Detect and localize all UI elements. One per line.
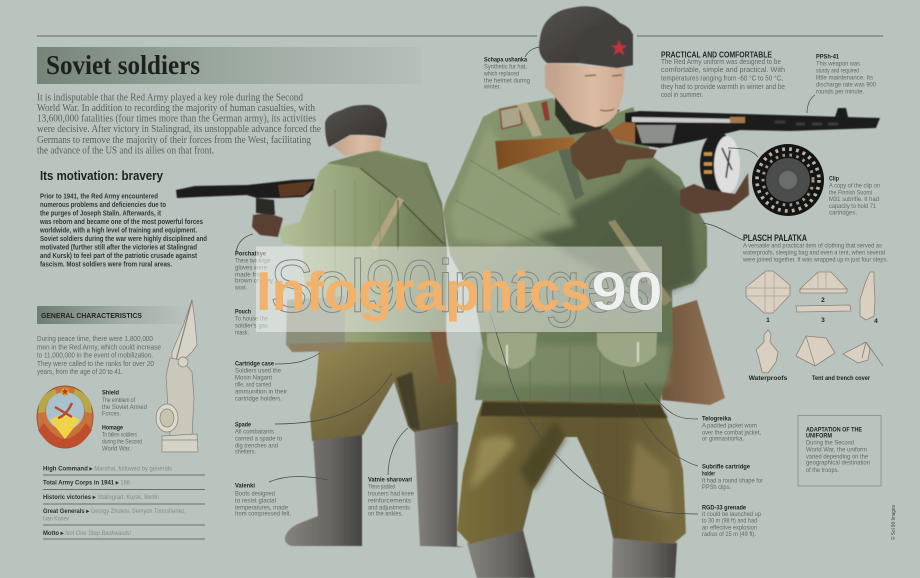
fact: motto: Motto ▸ Not One Step Backwards!: [43, 530, 131, 537]
callout: clip: [829, 175, 880, 216]
boots: [467, 530, 535, 578]
callout: PPSh-41: This weapon was: [816, 60, 861, 67]
callout: PPSh-41: PPSh-41: [816, 53, 839, 60]
holster: [430, 330, 450, 384]
callout: RGD-33 grenade: an effective explosion: [702, 524, 757, 531]
motivation text: and Kursk) to feel part of the patriotic crusade against: [40, 251, 197, 260]
callout: adaptation of the uniform: During the Second: [806, 439, 854, 446]
panel: general characteristics: [37, 306, 189, 376]
face: [545, 63, 625, 127]
callout: vatnie sharovari: Vatnie sharovari: [368, 476, 412, 483]
motivation text: motivated (further still after the victories at Stalingrad: [40, 242, 197, 252]
top rule left: [37, 35, 883, 37]
motivation text: the purges of Joseph Stalin. Afterwards, it: [40, 208, 161, 218]
callout: pouch: [235, 308, 269, 336]
panel: practical and comfortable: comfortable, simple and practical. With: [661, 65, 785, 74]
motivation text: fascism. Most soldiers were from rural areas.: [40, 260, 172, 268]
ushanka hat: [539, 6, 633, 68]
callout: vatnie sharovari: [368, 476, 414, 518]
callout: porchatkye: brown or grey: [235, 278, 274, 284]
characteristics text: men in the Red Army, which could increase: [37, 342, 161, 351]
characteristics text: [37, 334, 161, 376]
panel: practical and comfortable: PRACTICAL AND COMFORTABLE: [661, 50, 773, 60]
callout: PPSh-41: little maintenance. Its: [816, 74, 874, 81]
callout: valenki: temperatures, made: [235, 504, 288, 511]
step 3: 3: [821, 317, 825, 324]
panel: plasch palatka: PLASCH PALATKA: [743, 233, 808, 243]
callout: porchatkye: made from: [235, 271, 265, 278]
shield and homage text: Forces.: [102, 411, 121, 418]
panel: practical and comfortable: [661, 50, 785, 99]
callout: RGD-33 grenade: It could be launched up: [702, 511, 761, 518]
callout: clip: the Finnish Suomi: [829, 189, 872, 196]
support hand glove: [680, 173, 749, 214]
waterproofs: Waterproofs: [749, 375, 788, 382]
callout: spade: carried a spade to: [235, 435, 282, 442]
callout: valenki: from compressed felt.: [235, 510, 291, 518]
callout: spade: [235, 421, 282, 456]
trigger hand glove: [570, 128, 657, 180]
callout: clip: A copy of the clip on: [829, 182, 880, 189]
panel: practical and comfortable: cool in summer.: [661, 90, 703, 99]
glove: [252, 213, 283, 237]
callout: RGD-33 grenade: to 30 m (98 ft) and had: [702, 517, 757, 524]
magazine drum detail: [752, 144, 824, 216]
trousers: [457, 400, 686, 544]
watermark: Sol90images: [270, 245, 650, 328]
drum magazine: [700, 132, 740, 198]
icon: red star: [611, 40, 627, 55]
callout: clip: capacity to hold 71: [829, 203, 876, 210]
callout: porchatkye: Porchatkye: [235, 250, 266, 257]
trench cover: [843, 342, 870, 363]
panel: plasch palatka: [742, 233, 888, 263]
step 2: 2: [821, 297, 825, 304]
callout: telogreika: over the combat jacket,: [702, 429, 761, 436]
intro text: [37, 92, 321, 156]
callout: vatnie sharovari: and adjustments: [368, 504, 411, 511]
callout: subrifle cartridge holder: PPSh clips.: [702, 484, 731, 491]
callout: schapa ushanka: which replaced: [483, 70, 519, 77]
shield and homage text: the Soviet Armed: [102, 404, 147, 411]
motivation text: Prior to 1941, the Red Army encountered: [40, 192, 158, 200]
callout: subrifle cartridge holder: It had a round shape for: [702, 477, 764, 484]
shield and homage text: [102, 390, 147, 452]
table: key facts: [43, 466, 205, 539]
panel: practical and comfortable: The Red Army uniform was designed to be: [661, 57, 781, 66]
jacket shading: [530, 165, 695, 300]
motivation text: worldwide, with a high level of training and equipment.: [39, 226, 197, 234]
shoulder bag: [662, 300, 725, 405]
panel: plasch palatka: waterproofs, sleeping bag and even a tent, when several: [742, 249, 885, 256]
callout: telogreika: [702, 415, 761, 442]
rifle stock: [495, 137, 577, 170]
callout: schapa ushanka: winter.: [483, 84, 501, 90]
shield and homage text: Shield: [102, 390, 119, 396]
callout: schapa ushanka: Synthetic fur hat,: [484, 63, 527, 70]
callout: porchatkye: wool.: [234, 284, 247, 291]
callout: vatnie sharovari: reinforcements: [368, 497, 412, 504]
callout: RGD-33 grenade: radius of 15 m (49 ft).: [702, 531, 756, 538]
watermark: Infographics: [256, 260, 591, 322]
motivation text: Soviet soldiers during the war were highly disciplined and: [40, 234, 207, 243]
soldier seen from the front: [443, 6, 880, 578]
callout: cartridge case: rifle, and carried: [235, 381, 271, 388]
characteristics text: During peace time, there were 1,800,000: [37, 334, 153, 343]
shield and homage text: during the Second: [102, 438, 142, 445]
callout: pouch: mask.: [235, 329, 249, 336]
callout: porchatkye: These two-finger: [235, 257, 272, 264]
callout: adaptation of the uniform: ADAPTATION OF THE: [806, 426, 862, 433]
heading: GENERAL CHARACTERISTICS: [41, 311, 142, 320]
callout: cartridge case: Mosin Nagant: [235, 374, 272, 381]
watermark: 90: [591, 260, 663, 322]
callout: spade: dig trenches and: [235, 442, 278, 449]
callout: schapa ushanka: [483, 56, 530, 90]
callout: adaptation of the uniform: of the troops.: [806, 467, 839, 474]
callout: spade: Spade: [235, 421, 251, 428]
callout: adaptation of the uniform: varied depending on the: [806, 453, 868, 460]
callout: pouch: Pouch: [235, 308, 251, 315]
title: Soviet soldiers: [46, 50, 200, 80]
icon: Soviet emblem shield: [37, 386, 93, 448]
callout: RGD-33 grenade: [702, 504, 761, 538]
callout: clip: Clip: [829, 175, 839, 182]
shield and homage text: To fallen soldiers: [102, 432, 137, 438]
motivation text: was reborn and became one of the most powerful forces: [39, 217, 203, 226]
callout: valenki: [235, 482, 291, 518]
callout: adaptation of the uniform: World War, the uniform: [806, 446, 867, 453]
fact: victories: Historic victories ▸ Stalingrad, Kursk, Berlin: [43, 494, 159, 501]
ear: [545, 63, 557, 89]
callout: cartridge case: [235, 360, 288, 402]
callout: cartridge case: ammunition in their: [235, 388, 288, 395]
callout: telogreika: A padded jacket worn: [702, 422, 757, 429]
callout: valenki: to resist glacial: [235, 497, 276, 504]
intro text: were decisive. After victory in Stalingrad, its unstoppable advance forced the: [37, 124, 321, 135]
callout: schapa ushanka: Schapa ushanka: [484, 56, 527, 63]
callout: cartridge case: Soldiers used the: [235, 367, 281, 374]
callout: subrifle cartridge holder: Subrifle cartridge: [702, 463, 750, 470]
panel: practical and comfortable: they had to provide warmth in winter and be: [661, 82, 785, 91]
intro text: the advance of the US and its allies on that front.: [37, 145, 214, 156]
sleeve cuff: [558, 148, 584, 200]
callout: cartridge case: cartridge holders.: [235, 395, 282, 402]
leader lines: [236, 47, 815, 514]
motivation text: [39, 192, 207, 268]
characteristics text: to 11,000,000 in the event of mobilization.: [37, 351, 153, 360]
shoulder strap: [517, 102, 542, 137]
callout: cartridge case: Cartridge case: [235, 360, 274, 367]
fact: generals: Great Generals ▸ Georgy Zhukov, Semyon Timoshenko,: [43, 508, 186, 515]
rifle body and barrel: [625, 111, 880, 148]
intro text: It is indisputable that the Red Army played a key role during the Second: [37, 92, 303, 104]
callout: adaptation of the uniform: geographical destination: [806, 460, 870, 466]
callout: porchatkye: gloves were: [235, 264, 267, 271]
neck: [555, 97, 620, 135]
panel: plasch palatka: A versatile and practical item of clothing that served as: [743, 242, 883, 250]
soldier seen from the back: [176, 105, 465, 547]
panel: plasch palatka: were joined together. It was wrapped up in just four steps.: [742, 256, 888, 263]
callout: valenki: Valenki: [235, 482, 255, 489]
callout: spade: All combatants: [235, 428, 275, 435]
pouch bag: [286, 296, 345, 352]
wood grip: [607, 122, 635, 143]
step 1: 1: [766, 317, 770, 324]
heading: motivation: Its motivation: bravery: [40, 168, 164, 183]
heading band: [37, 306, 189, 324]
jacket: [443, 98, 707, 403]
callout: subrifle cartridge holder: holder: [702, 470, 715, 477]
trousers: [310, 340, 457, 441]
shield and homage text: World War.: [102, 445, 131, 452]
jacket back: [278, 150, 447, 342]
intro text: 13,600,000 fatalities (four times more than the German army), its activities: [37, 114, 316, 125]
diagram: folding steps: [746, 271, 883, 382]
collar tabs: [500, 106, 522, 129]
callout: PPSh-41: discharge rate was 900: [816, 81, 876, 88]
characteristics text: years, from the age of 20 to 41.: [37, 367, 123, 376]
front pouches: [487, 333, 537, 369]
callout: schapa ushanka: the helmet during: [484, 77, 530, 84]
callout: porchatkye: [234, 250, 274, 291]
callout: clip: cartridges.: [829, 210, 857, 216]
characteristics text: They were called to the ranks for over 20: [37, 359, 154, 368]
fact: army corps: Total Army Corps in 1941 ▸ 188: [43, 480, 130, 486]
callout: RGD-33 grenade: RGD-33 grenade: [702, 504, 746, 511]
intro text: World War. In addition to recording the majority of human casualties, with: [37, 103, 315, 114]
tent: Tent and trench cover: [812, 375, 870, 382]
callout: spade: shelters.: [235, 448, 256, 456]
shield and homage text: The emblem of: [102, 397, 135, 404]
table: key facts: Ivan Konev: [43, 516, 70, 522]
callout: adaptation of the uniform: UNIFORM: [806, 432, 832, 440]
neck: [333, 135, 382, 156]
callout: PPSh-41: sturdy and required: [816, 67, 859, 74]
panel: practical and comfortable: temperatures ranging from -60 °C to 50 °C,: [661, 74, 783, 82]
hat: [325, 105, 387, 147]
chest strap: [608, 220, 672, 306]
callout: pouch: soldier's gas: [235, 322, 269, 329]
callout: subrifle cartridge holder: [702, 463, 764, 491]
title band: [37, 47, 421, 84]
callout: PPSh-41: [816, 53, 876, 95]
callout: telogreika: Telogreika: [702, 415, 731, 422]
callout: PPSh-41: rounds per minute.: [816, 88, 864, 95]
fact: high command: High Command ▸ Marshal, followed by generals: [43, 466, 172, 472]
callout: telogreika: or gimnastiorka.: [702, 436, 744, 442]
callout: vatnie sharovari: trousers had knee: [368, 490, 414, 497]
rifle: [176, 179, 315, 198]
callout: clip: M31 subrifle. It had: [829, 196, 879, 203]
rear boots: [414, 422, 465, 547]
icon: monument with flag: [156, 300, 198, 452]
callout: vatnie sharovari: These padded: [368, 483, 395, 490]
callout: adaptation of the uniform: [798, 416, 881, 486]
intro text: Germans to remove the majority of their forces from the West, facilitating: [37, 135, 311, 146]
callout: valenki: Boots designed: [235, 490, 275, 497]
step 4: 4: [874, 318, 878, 325]
callout: pouch: To house the: [235, 315, 268, 322]
motivation text: numerous problems and deficiencies due to: [40, 200, 166, 209]
callout: vatnie sharovari: on the ankles.: [368, 510, 403, 518]
credit: © Sol 90 Images: [890, 505, 897, 540]
shield and homage text: Homage: [102, 424, 123, 432]
